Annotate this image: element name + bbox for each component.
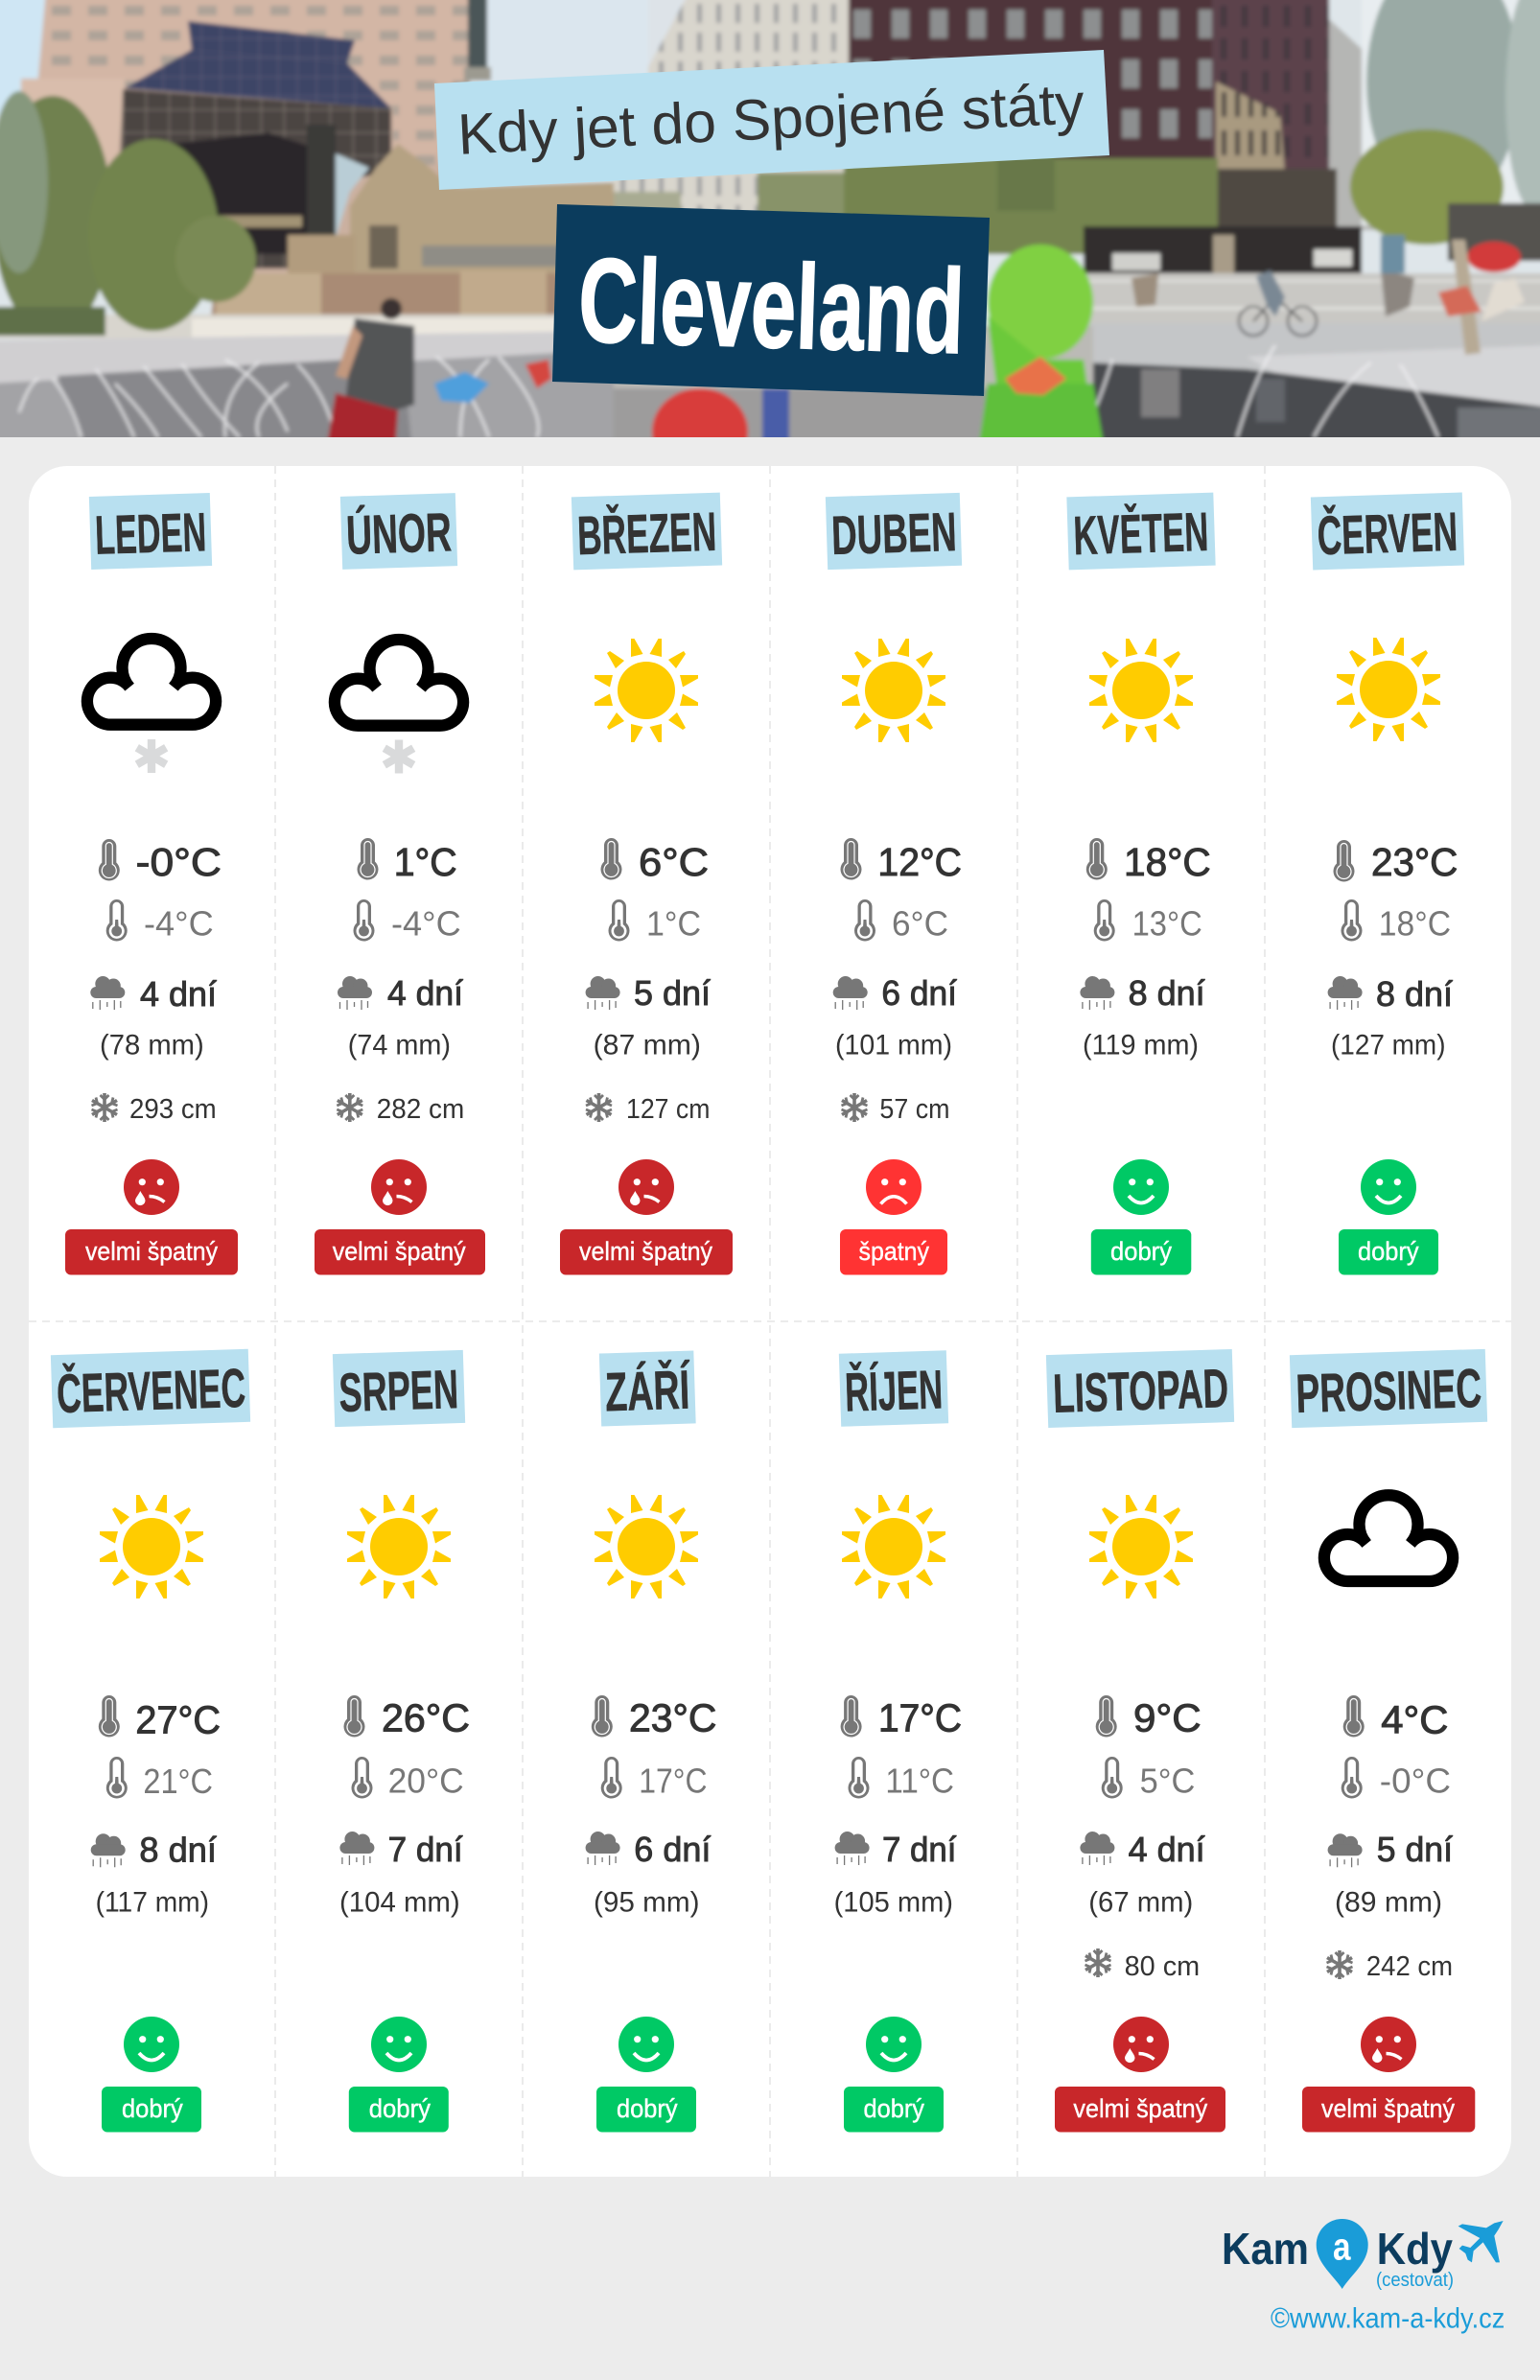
low temperature: 13°C <box>1132 903 1202 944</box>
icon: rain cloud <box>338 976 372 1010</box>
precipitation: (104 mm) <box>339 1886 460 1918</box>
icon: sun <box>842 639 945 742</box>
icon: thermometer low <box>1102 1757 1123 1799</box>
icon: snowflake <box>842 1093 867 1122</box>
precipitation: (101 mm) <box>835 1030 952 1061</box>
rainy days: 4 dní <box>140 974 217 1014</box>
rating badge <box>1055 2087 1225 2133</box>
rainy days: 6 dní <box>881 973 957 1013</box>
icon: thermometer low <box>601 1757 622 1799</box>
rainy days: 5 dní <box>634 973 711 1013</box>
high temperature: 23°C <box>629 1696 716 1740</box>
high temperature: 9°C <box>1133 1696 1202 1740</box>
icon: thermometer low <box>106 1757 128 1799</box>
low temperature: 18°C <box>1379 903 1451 944</box>
rating badge: dobrý <box>1110 1237 1172 1266</box>
month label <box>340 493 457 570</box>
icon: sun <box>347 1495 451 1598</box>
icon: happy face <box>618 2017 674 2072</box>
icon: thermometer low <box>106 899 128 942</box>
icon: happy face <box>371 2017 427 2072</box>
icon: thermometer high <box>99 1695 120 1738</box>
high temperature: 4°C <box>1381 1697 1448 1741</box>
rating badge: špatný <box>859 1237 929 1266</box>
month label <box>89 493 212 570</box>
icon: rain cloud <box>1080 1832 1114 1865</box>
logo: Kam a Kdy <box>1222 2219 1504 2291</box>
month label <box>839 1350 948 1427</box>
rating badge: velmi špatný <box>85 1237 218 1266</box>
month: brezen <box>560 493 733 1275</box>
month label <box>572 493 722 570</box>
icon: snowflake <box>1327 1950 1352 1979</box>
low temperature: -4°C <box>144 903 214 944</box>
icon: snowflake <box>586 1093 612 1122</box>
rainy days: 7 dní <box>882 1830 957 1869</box>
heading banner: Kdy jet do Spojené státy <box>434 50 1109 190</box>
snowfall: 57 cm <box>879 1094 949 1125</box>
rating badge: dobrý <box>1358 1237 1419 1266</box>
rating badge <box>840 1229 947 1275</box>
rating badge <box>315 1229 485 1275</box>
month: srpen <box>333 1350 470 2133</box>
rainy days: 7 dní <box>388 1830 463 1869</box>
rainy days: 4 dní <box>387 973 463 1013</box>
icon: thermometer high <box>1086 838 1108 880</box>
month label <box>1311 493 1464 570</box>
icon: cloud <box>1324 1495 1453 1581</box>
rating badge: velmi špatný <box>1321 2094 1455 2123</box>
rating badge <box>1091 1229 1191 1275</box>
icon: thermometer low <box>608 899 629 942</box>
snowfall: 293 cm <box>129 1094 217 1125</box>
icon: crying face <box>371 1159 427 1215</box>
precipitation: (119 mm) <box>1083 1030 1199 1061</box>
icon: thermometer high <box>1333 840 1354 882</box>
month label: KVĚTEN <box>1072 501 1209 567</box>
icon: rain cloud <box>835 1832 870 1865</box>
low temperature: -0°C <box>1380 1761 1451 1801</box>
icon: happy face <box>1361 1159 1416 1215</box>
icon: rain cloud <box>1080 976 1114 1010</box>
month: listopad <box>1046 1349 1234 2133</box>
icon: rain cloud <box>90 976 125 1010</box>
month: unor <box>315 493 485 1275</box>
month: kveten <box>1066 493 1216 1275</box>
rating badge <box>349 2087 449 2133</box>
icon: thermometer low <box>854 899 875 942</box>
high temperature: 27°C <box>135 1697 221 1741</box>
month: cervenec <box>51 1349 250 2133</box>
title banner: Cleveland: Cleveland <box>576 234 966 379</box>
icon: happy face <box>866 2017 922 2072</box>
logo: Kam a Kdy: Kam <box>1222 2224 1309 2274</box>
high temperature: 1°C <box>394 840 457 884</box>
rating badge <box>1302 2087 1475 2133</box>
rating badge <box>65 1229 238 1275</box>
month label: ŘÍJEN <box>844 1358 944 1424</box>
icon: rain cloud <box>586 1832 620 1865</box>
low temperature: 11°C <box>885 1761 954 1800</box>
snowfall: 127 cm <box>626 1094 710 1125</box>
month label <box>1290 1349 1487 1428</box>
icon: rain cloud <box>586 976 620 1010</box>
low temperature: 17°C <box>639 1761 708 1801</box>
low temperature: 6°C <box>892 903 948 944</box>
icon: airplane <box>1458 2221 1504 2262</box>
rating badge <box>560 1229 733 1275</box>
logo: Kam a Kdy: (cestovat) <box>1376 2270 1454 2291</box>
rating badge: velmi špatný <box>579 1237 712 1266</box>
precipitation: (67 mm) <box>1088 1886 1193 1918</box>
icon: rain cloud <box>1328 1833 1363 1867</box>
icon: crying face <box>1113 2017 1169 2072</box>
icon: thermometer high <box>1096 1695 1117 1738</box>
month label: DUBEN <box>830 502 958 567</box>
rating badge: dobrý <box>863 2094 924 2123</box>
precipitation: (105 mm) <box>834 1886 953 1918</box>
icon: cloud with snow <box>335 640 463 773</box>
month: leden <box>65 493 238 1275</box>
rating badge: dobrý <box>122 2094 183 2123</box>
icon: thermometer low <box>1094 899 1115 942</box>
month label: ČERVEN <box>1317 501 1458 567</box>
icon: sad face <box>866 1159 922 1215</box>
precipitation: (89 mm) <box>1335 1886 1442 1918</box>
logo: Kam a Kdy: Kdy <box>1377 2224 1453 2274</box>
month label <box>1066 493 1216 570</box>
icon: snowflake <box>1085 1948 1110 1977</box>
month: rijen <box>834 1350 962 2133</box>
icon: thermometer high <box>841 1695 862 1738</box>
icon: rain cloud <box>833 976 868 1010</box>
high temperature: 6°C <box>639 840 709 884</box>
icon: sun <box>842 1495 945 1598</box>
website url: ©www.kam-a-kdy.cz <box>1271 2303 1505 2335</box>
low temperature: 1°C <box>646 903 701 944</box>
high temperature: 26°C <box>382 1696 470 1740</box>
icon: sun <box>1089 639 1193 742</box>
icon: snowflake <box>337 1093 362 1122</box>
high temperature: -0°C <box>136 840 222 884</box>
icon: rain cloud <box>1328 976 1363 1010</box>
title banner: Cleveland <box>552 204 990 396</box>
icon: rain cloud <box>339 1832 374 1865</box>
month label: LEDEN <box>94 502 207 567</box>
month: duben <box>826 493 962 1275</box>
icon: thermometer high <box>99 839 120 881</box>
rating badge: velmi špatný <box>1073 2094 1208 2123</box>
icon: sun <box>595 1495 698 1598</box>
rating badge: dobrý <box>369 2094 431 2123</box>
low temperature: 20°C <box>388 1761 464 1801</box>
low temperature: 5°C <box>1140 1761 1195 1801</box>
icon: map pin <box>1317 2219 1368 2289</box>
icon: thermometer low <box>1342 1757 1363 1799</box>
rainy days: 8 dní <box>1129 973 1205 1013</box>
month: cerven <box>1311 493 1464 1275</box>
precipitation: (74 mm) <box>348 1030 451 1061</box>
white calendar card <box>29 466 1511 2177</box>
icon: thermometer low <box>848 1757 869 1799</box>
month label <box>1046 1349 1234 1428</box>
rating badge <box>844 2087 944 2133</box>
high temperature: 17°C <box>878 1695 962 1739</box>
icon: thermometer low <box>351 1757 372 1799</box>
month label <box>333 1350 465 1427</box>
icon: map pin: a <box>1333 2227 1351 2269</box>
icon: sun <box>100 1495 203 1598</box>
rainy days: 8 dní <box>1376 974 1453 1014</box>
month label: ÚNOR <box>345 502 453 567</box>
rating badge: velmi špatný <box>333 1237 466 1266</box>
icon: sun <box>1089 1495 1193 1598</box>
rainy days: 6 dní <box>634 1830 711 1869</box>
icon: thermometer high <box>343 1695 364 1738</box>
icon: thermometer low <box>1341 899 1362 942</box>
month: prosinec <box>1290 1349 1487 2133</box>
high temperature: 23°C <box>1371 840 1458 884</box>
icon: crying face <box>1361 2017 1416 2072</box>
rating badge <box>102 2087 201 2133</box>
icon: thermometer low <box>353 899 374 942</box>
rating badge <box>1339 1229 1438 1275</box>
month label <box>599 1350 696 1427</box>
month label: SRPEN <box>338 1359 459 1424</box>
low temperature: -4°C <box>391 903 461 944</box>
rainy days: 8 dní <box>139 1830 217 1869</box>
icon: rain cloud <box>91 1833 126 1867</box>
month label <box>51 1349 250 1428</box>
precipitation: (78 mm) <box>100 1030 204 1061</box>
month label: ZÁŘÍ <box>604 1359 692 1423</box>
icon: snowflake <box>92 1093 117 1122</box>
icon: thermometer high <box>840 838 861 880</box>
snowfall: 282 cm <box>377 1094 464 1125</box>
precipitation: (117 mm) <box>96 1886 209 1918</box>
rating badge: dobrý <box>617 2094 678 2123</box>
month label: LISTOPAD <box>1052 1358 1229 1425</box>
icon: sun <box>595 639 698 742</box>
rainy days: 4 dní <box>1129 1830 1205 1869</box>
rainy days: 5 dní <box>1377 1830 1453 1869</box>
low temperature: 21°C <box>143 1762 213 1801</box>
snowfall: 242 cm <box>1366 1951 1453 1982</box>
month label <box>826 493 962 570</box>
icon: happy face <box>124 2017 179 2072</box>
heading banner: Kdy jet do Spojené státy: Kdy jet do Spojené státy <box>456 71 1085 167</box>
icon: sun <box>1337 638 1440 741</box>
icon: thermometer high <box>600 838 621 880</box>
icon: thermometer high <box>357 838 378 880</box>
icon: thermometer high <box>592 1695 613 1738</box>
icon: crying face <box>124 1159 179 1215</box>
icon: happy face <box>1113 1159 1169 1215</box>
high temperature: 12°C <box>877 840 962 884</box>
snowfall: 80 cm <box>1125 1951 1200 1982</box>
header photo: Cleveland square with fountain <box>0 0 1540 475</box>
rating badge <box>596 2087 696 2133</box>
precipitation: (127 mm) <box>1331 1030 1446 1061</box>
month: zari <box>586 1350 716 2133</box>
precipitation: (95 mm) <box>594 1886 700 1918</box>
precipitation: (87 mm) <box>594 1030 701 1061</box>
high temperature: 18°C <box>1124 840 1211 884</box>
month label: BŘEZEN <box>576 501 717 567</box>
icon: crying face <box>618 1159 674 1215</box>
month label: ČERVENEC <box>56 1357 246 1425</box>
icon: cloud with snow <box>87 639 216 773</box>
icon: thermometer high <box>1343 1695 1365 1738</box>
